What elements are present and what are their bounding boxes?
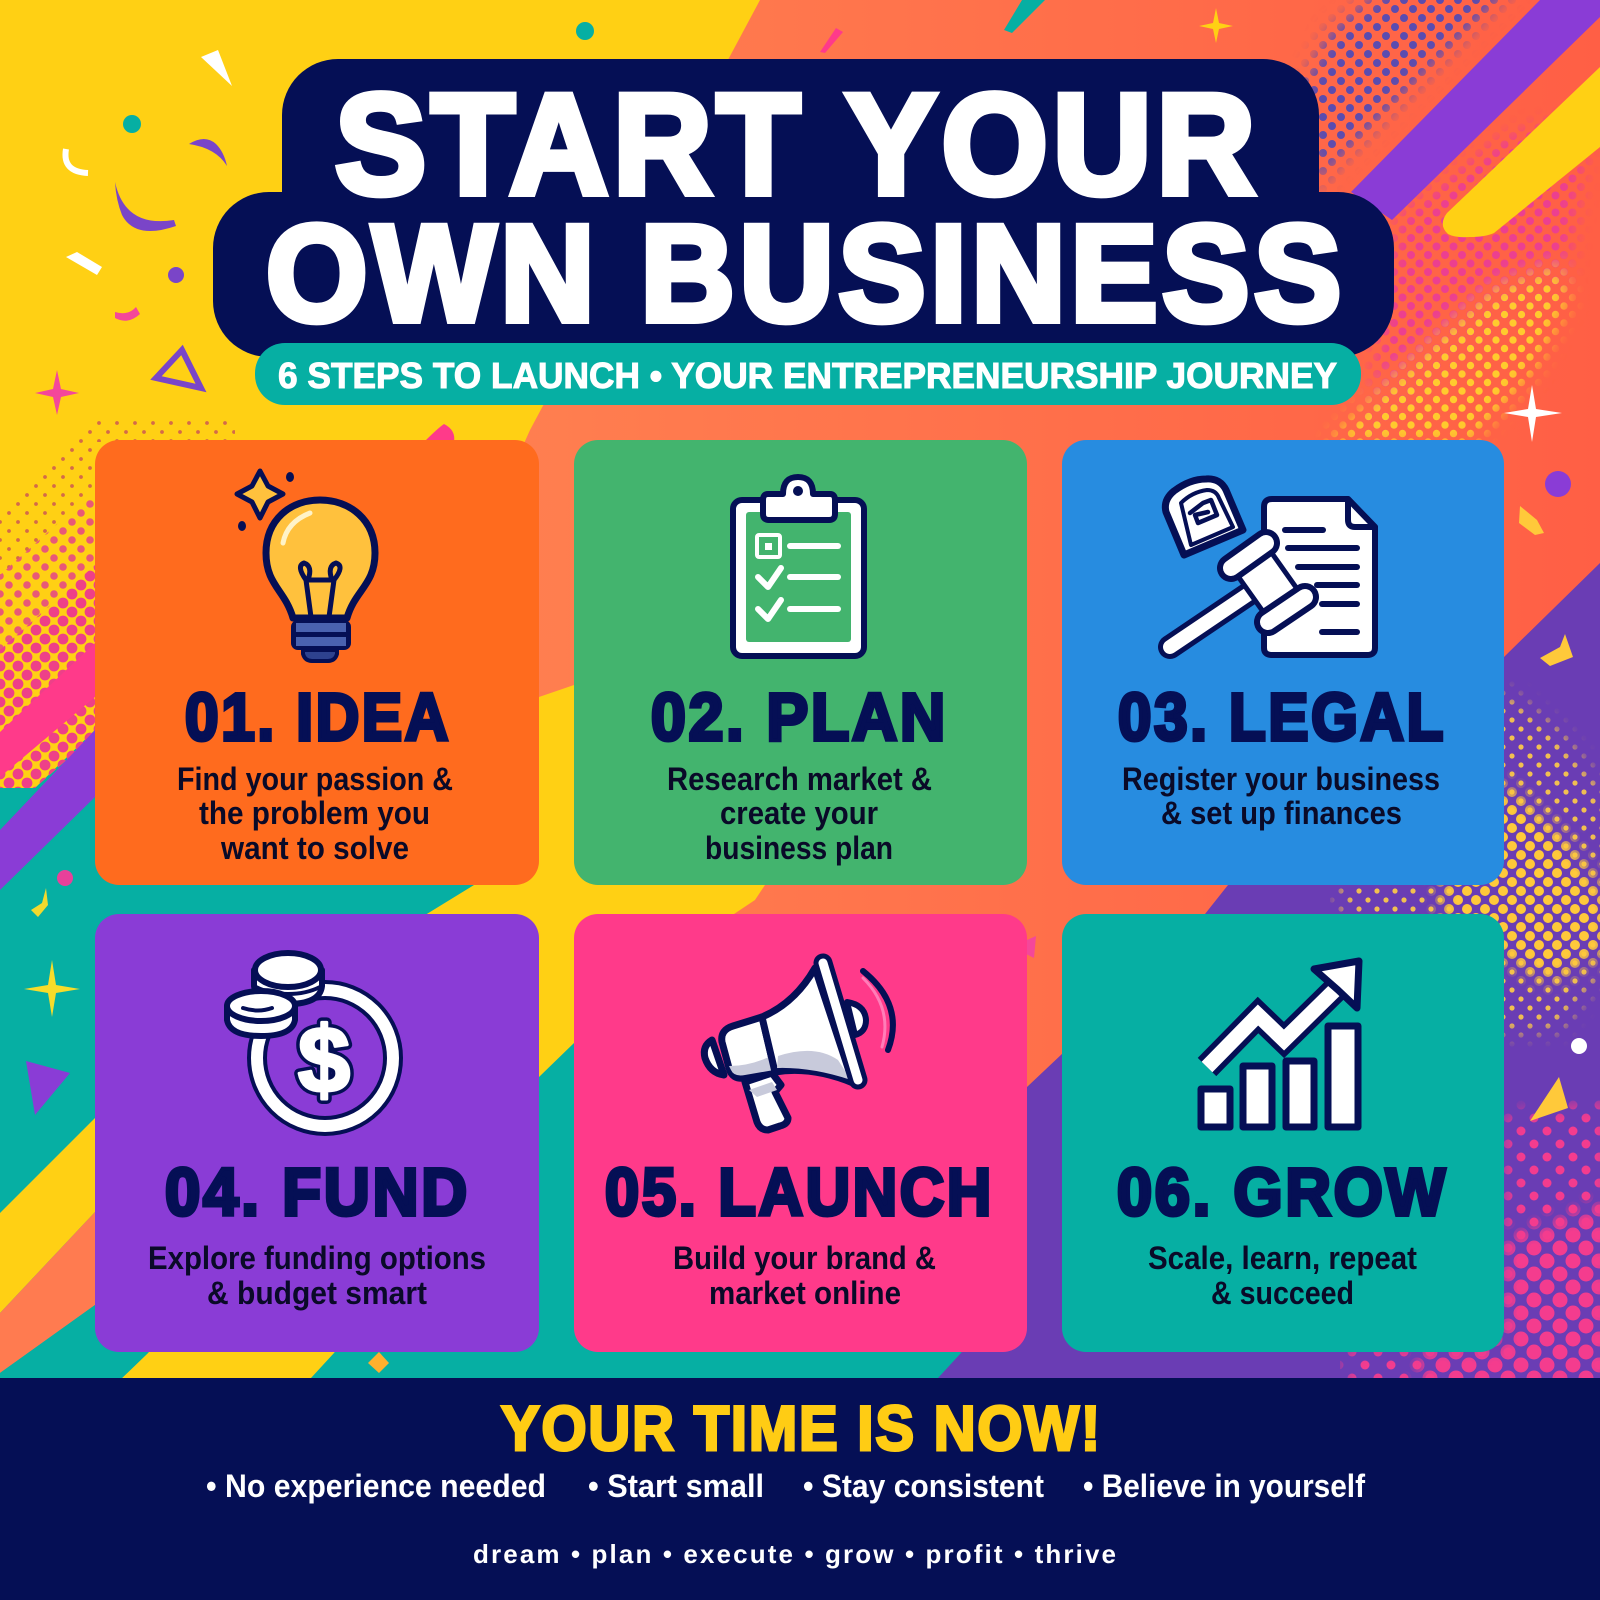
panel: idea bbox=[95, 440, 539, 885]
description: launch bbox=[673, 1240, 936, 1311]
description: grow: & succeed bbox=[1211, 1275, 1354, 1311]
panel: legal bbox=[1062, 440, 1504, 885]
heading: 05 launch: 05. LAUNCH bbox=[605, 1155, 994, 1230]
title line 1: START YOUR bbox=[335, 66, 1260, 224]
description: plan: Research market & bbox=[667, 761, 932, 797]
icon: light bulb bbox=[237, 471, 375, 661]
footer band bbox=[0, 1378, 1600, 1600]
description: fund: & budget smart bbox=[207, 1275, 427, 1311]
tips row: • No experience needed bbox=[206, 1468, 546, 1504]
heading: 02 plan: 02. PLAN bbox=[651, 680, 948, 755]
tips row: • Start small bbox=[588, 1468, 764, 1504]
panel: fund bbox=[95, 914, 539, 1352]
description: idea bbox=[177, 761, 453, 866]
description: idea: Find your passion & bbox=[177, 761, 453, 797]
icon: clipboard checklist bbox=[733, 477, 864, 656]
card 04: fund bbox=[95, 914, 539, 1352]
description: grow: Scale, learn, repeat bbox=[1148, 1240, 1417, 1276]
description: legal bbox=[1122, 761, 1440, 831]
icon: growth chart bbox=[1201, 961, 1359, 1127]
card 06: grow bbox=[1062, 914, 1504, 1352]
panel: plan bbox=[574, 440, 1027, 885]
description: launch: Build your brand & bbox=[673, 1240, 936, 1276]
description: legal: Register your business bbox=[1122, 761, 1440, 797]
description: idea: the problem you bbox=[199, 795, 430, 831]
description: plan bbox=[667, 761, 932, 866]
tips row: • Believe in yourself bbox=[1083, 1468, 1365, 1504]
heading: 06 grow: 06. GROW bbox=[1117, 1155, 1448, 1230]
card 02: plan bbox=[574, 440, 1027, 885]
icon: coins and dollar: $ bbox=[298, 1007, 350, 1112]
description: plan: business plan bbox=[705, 830, 893, 866]
card 01: idea bbox=[95, 440, 539, 885]
icon: gavel, seal and document bbox=[1165, 479, 1375, 655]
title lower pill bbox=[213, 192, 1394, 357]
footer headline: YOUR TIME IS NOW! bbox=[501, 1394, 1102, 1464]
description: legal: & set up finances bbox=[1161, 795, 1402, 831]
icon: coins and dollar: $ bbox=[298, 1007, 350, 1112]
icon: megaphone bbox=[704, 963, 893, 1130]
subtitle pill bbox=[255, 343, 1361, 405]
description: idea: want to solve bbox=[220, 830, 409, 866]
tagline: dream • plan • execute • grow • profit • thrive bbox=[473, 1539, 1116, 1569]
icon: coins and dollar bbox=[227, 953, 393, 1126]
heading: 04 fund: 04. FUND bbox=[165, 1155, 470, 1230]
description: grow bbox=[1148, 1240, 1417, 1311]
description: launch: market online bbox=[709, 1275, 901, 1311]
title upper pill bbox=[282, 59, 1319, 249]
title line 2: OWN BUSINESS bbox=[266, 198, 1346, 350]
description: fund: Explore funding options bbox=[148, 1240, 486, 1276]
panel: launch bbox=[574, 914, 1027, 1352]
description: plan: create your bbox=[720, 795, 878, 831]
heading: 01 idea: 01. IDEA bbox=[185, 680, 451, 755]
card 05: launch bbox=[574, 914, 1027, 1352]
tips row: • Stay consistent bbox=[803, 1468, 1044, 1504]
description: fund bbox=[148, 1240, 486, 1311]
subtitle: 6 STEPS TO LAUNCH • YOUR ENTREPRENEURSHIP JOURNEY bbox=[278, 355, 1337, 396]
card 03: legal bbox=[1062, 440, 1504, 885]
panel: grow bbox=[1062, 914, 1504, 1352]
tips row bbox=[206, 1468, 1365, 1504]
title banner bbox=[213, 59, 1394, 405]
heading: 03 legal: 03. LEGAL bbox=[1118, 680, 1446, 755]
